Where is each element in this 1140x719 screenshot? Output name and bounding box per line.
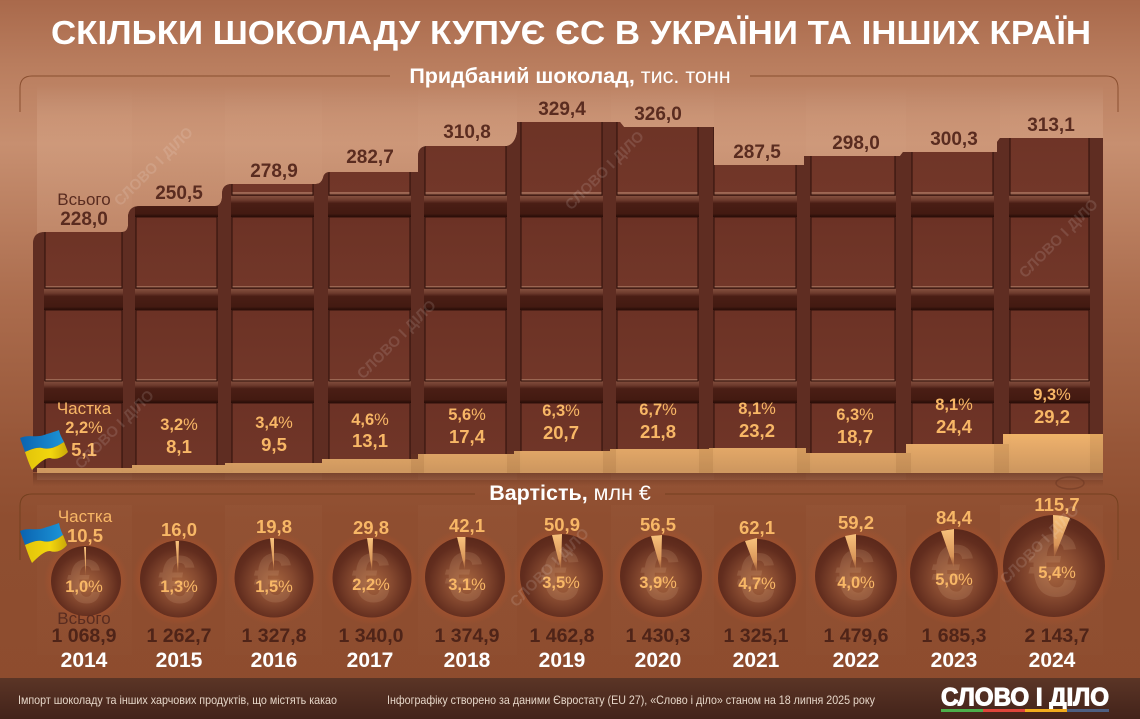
total values and years: 2015 — [156, 649, 203, 672]
Ukraine volumes and shares: 20,7 — [543, 422, 579, 443]
circle 2019 — [512, 526, 610, 624]
Ukraine volumes and shares: 2,2% — [65, 419, 103, 437]
label: total: Всього — [57, 609, 111, 628]
total values and years: 2020 — [635, 649, 681, 672]
total values and years: 2017 — [347, 649, 393, 672]
Ukraine volumes and shares: 23,2 — [739, 420, 775, 441]
Ukraine volumes and shares: 8,1 — [166, 436, 192, 457]
value circles — [44, 506, 1114, 626]
circle 2023 — [902, 521, 1006, 625]
total values and years: 1 685,3 — [921, 625, 987, 647]
circle 2024 — [994, 506, 1114, 626]
totals above chocolate: 329,4 — [538, 99, 586, 120]
circle 2017 — [325, 531, 419, 625]
Ukraine values and shares: 115,7 — [1034, 494, 1080, 515]
icon: Ukrainian flag, values — [20, 523, 67, 563]
total values and years: 2024 — [1029, 649, 1076, 672]
frame: value panel — [20, 494, 1118, 560]
Ukraine volumes and shares: 3,2% — [160, 416, 198, 434]
watermarks: СЛОВО І ДІЛО — [72, 387, 158, 473]
Ukraine volumes and shares: 13,1 — [352, 430, 388, 451]
circle 2020 — [612, 527, 710, 625]
Ukraine volumes and shares: 4,6% — [351, 411, 389, 429]
Ukraine volumes and shares: 18,7 — [837, 426, 873, 447]
watermarks: СЛОВО І ДІЛО — [997, 502, 1083, 588]
embossed mark — [1056, 477, 1084, 489]
total values and years: 2022 — [833, 649, 879, 672]
watermarks: СЛОВО І ДІЛО — [562, 128, 648, 214]
total values and years: 2023 — [931, 649, 977, 672]
Ukraine volumes and shares: 5,6% — [448, 406, 486, 424]
total values and years: 2018 — [444, 649, 491, 672]
heading: purchased chocolate: Придбаний шоколад, тис. тонн — [409, 64, 731, 88]
Ukraine volumes and shares: 6,7% — [639, 401, 677, 419]
Ukraine volumes and shares: 29,2 — [1034, 406, 1070, 427]
Ukraine volumes and shares: 8,1% — [738, 400, 776, 418]
Ukraine values and shares: 50,9 — [544, 514, 580, 535]
total values and years: 1 479,6 — [823, 625, 889, 647]
Ukraine values and shares — [58, 494, 1080, 596]
Ukraine values and shares: 3,5% — [542, 574, 580, 592]
shadow under chocolate — [33, 473, 1103, 486]
total values and years: 2 143,7 — [1024, 625, 1090, 647]
circle 2022 — [807, 527, 905, 625]
Ukraine values and shares: 62,1 — [739, 517, 775, 538]
totals above chocolate: 310,8 — [443, 122, 491, 143]
Ukraine values and shares: 1,3% — [160, 578, 198, 596]
total values and years: 1 430,3 — [625, 625, 691, 647]
circle 2015: € — [158, 542, 196, 618]
total values and years: 1 325,1 — [723, 625, 789, 647]
label: share: Частка — [57, 399, 112, 418]
circle 2014 — [44, 539, 128, 623]
Ukraine stepped bar — [37, 434, 1103, 473]
Ukraine values and shares: 4,7% — [738, 575, 776, 593]
Ukraine volumes and shares: 6,3% — [836, 406, 874, 424]
circle 2023: € — [931, 528, 975, 616]
light column strips — [37, 85, 1103, 655]
Ukraine values and shares: 1,5% — [255, 578, 293, 596]
Ukraine volumes and shares: 9,5 — [261, 434, 287, 455]
circle 2021 — [710, 531, 804, 625]
logo: СЛОВО І ДІЛО — [941, 684, 1109, 712]
total values and years: 2016 — [251, 649, 297, 672]
Ukraine values and shares: 16,0 — [161, 519, 197, 540]
circle 2020: € — [640, 536, 680, 616]
totals above chocolate: 300,3 — [930, 129, 978, 150]
total values and years: 1 327,8 — [241, 625, 307, 647]
label: total: Всього — [57, 190, 111, 209]
source: Інфографіку створено за даними Євростату (EU 27), «Слово і діло» станом на 18 липня 2025 року — [387, 693, 875, 707]
watermarks: СЛОВО І ДІЛО — [354, 297, 440, 383]
Ukraine volumes and shares: 5,1 — [71, 439, 97, 460]
totals above chocolate: 326,0 — [634, 104, 682, 125]
Ukraine volumes and shares — [57, 386, 1071, 460]
Ukraine volumes and shares: 21,8 — [640, 421, 676, 442]
chocolate showing through Ukraine bar — [411, 434, 1103, 473]
Ukraine values and shares: 56,5 — [640, 514, 676, 535]
watermarks: СЛОВО І ДІЛО — [111, 124, 197, 210]
circle 2019: € — [540, 536, 580, 616]
Ukraine values and shares: 4,0% — [837, 574, 875, 592]
total values and years — [51, 609, 1090, 672]
totals above chocolate: 287,5 — [733, 142, 781, 163]
watermarks: СЛОВО І ДІЛО — [507, 525, 593, 611]
footer bar — [0, 678, 1140, 719]
Ukraine values and shares: 1,0% — [65, 578, 103, 596]
Ukraine volumes and shares: 3,4% — [255, 414, 293, 432]
Ukraine values and shares: 3,9% — [639, 574, 677, 592]
Ukraine values and shares: 2,2% — [352, 576, 390, 594]
circle 2021: € — [737, 539, 775, 617]
Ukraine values and shares: 59,2 — [838, 512, 874, 533]
total values and years: 2019 — [539, 649, 585, 672]
circle 2018: € — [445, 538, 483, 616]
totals above chocolate: 298,0 — [832, 133, 880, 154]
heading: value: Вартість, млн € — [489, 481, 651, 505]
total values and years: 1 462,8 — [529, 625, 595, 647]
totals above chocolate: 278,9 — [250, 161, 298, 182]
circle 2024: € — [1028, 516, 1078, 616]
icon: Ukrainian flag, volumes — [20, 430, 68, 470]
Ukraine volumes and shares: 17,4 — [449, 426, 486, 447]
circle 2022: € — [835, 536, 875, 616]
total values and years: 1 374,9 — [434, 625, 500, 647]
circle 2016: € — [254, 539, 292, 617]
label: share: Частка — [58, 507, 113, 526]
totals above chocolate — [57, 99, 1075, 230]
circle 2017: € — [352, 539, 390, 617]
total values and years: 1 068,9 — [51, 625, 117, 647]
Ukraine volumes and shares: 8,1% — [935, 396, 973, 414]
totals above chocolate: 250,5 — [155, 183, 203, 204]
totals above chocolate: 313,1 — [1027, 115, 1075, 136]
watermarks — [72, 124, 1102, 611]
Ukraine volumes and shares: 6,3% — [542, 402, 580, 420]
Ukraine volumes and shares: 9,3% — [1033, 386, 1071, 404]
Ukraine values and shares: 19,8 — [256, 516, 292, 537]
chocolate bar chart — [30, 100, 1106, 486]
circle 2016 — [227, 531, 321, 625]
Ukraine values and shares: 84,4 — [936, 507, 973, 528]
Ukraine values and shares: 42,1 — [449, 515, 485, 536]
Ukraine values and shares: 10,5 — [67, 525, 103, 546]
totals above chocolate: 282,7 — [346, 147, 394, 168]
circle 2018 — [417, 529, 513, 625]
circle 2015 — [132, 533, 224, 625]
Ukraine values and shares: 5,4% — [1038, 564, 1076, 582]
Ukraine values and shares: 29,8 — [353, 517, 389, 538]
title: СКІЛЬКИ ШОКОЛАДУ КУПУЄ ЄС В УКРАЇНИ ТА ІНШИХ КРАЇН — [51, 15, 1091, 52]
totals above chocolate: 228,0 — [60, 209, 108, 230]
Ukraine values and shares: 3,1% — [448, 576, 486, 594]
Ukraine values and shares: 5,0% — [935, 571, 973, 589]
total values and years: 2014 — [61, 649, 108, 672]
chocolate base — [30, 100, 1106, 475]
watermarks: СЛОВО І ДІЛО — [1016, 196, 1102, 282]
Ukraine volumes and shares: 24,4 — [936, 416, 973, 437]
total values and years: 1 262,7 — [146, 625, 212, 647]
total values and years: 1 340,0 — [338, 625, 404, 647]
footnote: Імпорт шоколаду та інших харчових продуктів, що містять какао — [18, 693, 337, 707]
circle 2014: € — [67, 548, 101, 617]
frame: purchased chocolate panel — [20, 76, 1118, 112]
total values and years: 2021 — [733, 649, 780, 672]
